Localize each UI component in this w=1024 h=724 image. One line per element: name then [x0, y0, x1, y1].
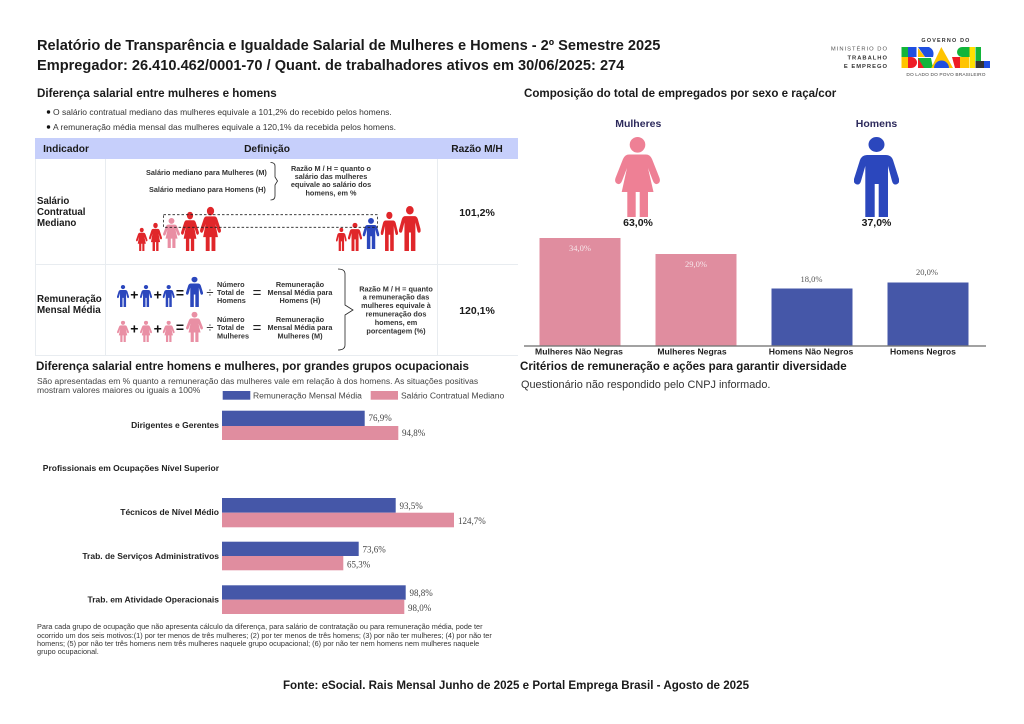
equation: women: =: [176, 319, 184, 335]
equation: men: +: [154, 286, 162, 302]
group: Técnicos: Técnicos de Nível Médio: [120, 507, 219, 517]
equation: women: Mensal Média para: [268, 323, 333, 332]
equation: women: Mulheres (M): [278, 332, 323, 340]
bullet list: A remuneração média mensal das mulheres equivale a 120,1% da recebida pelos homens.: [53, 122, 396, 132]
row: salário contratual mediano: equivale ao salário dos: [291, 180, 371, 189]
row: remuneração mensal média: Razão M / H = quanto: [359, 284, 433, 294]
equation: women: Total de: [217, 323, 244, 332]
logo: Ministério do Trabalho e Emprego: TRABALHO: [847, 56, 888, 62]
source line: Fonte: eSocial. Rais Mensal Junho de 2025 e Portal Emprega Brasil - Agosto de 2025: [283, 679, 750, 692]
group: Técnicos: 93,5%: [400, 501, 423, 511]
group: Dirigentes e Gerentes: 76,9%: [368, 413, 392, 423]
row: salário contratual mediano: homens, em %: [305, 188, 357, 198]
group: Serviços Administrativos: [82, 542, 386, 570]
indicator table: [35, 138, 518, 356]
logo: Ministério do Trabalho e Emprego: E EMPREGO: [844, 64, 888, 70]
group: Atividade Operacionais: 98,0%: [408, 603, 432, 613]
group: Serviços Administrativos: 65,3%: [347, 560, 371, 570]
footnote: Para cada grupo de ocupação que não apresenta cálculo da diferença, para salário de contratação ou para remuneração média, pode ter: [37, 622, 483, 631]
row: salário contratual mediano: [37, 162, 495, 251]
text: subtitle: [37, 376, 478, 395]
row: salário contratual mediano: Salário mediano para Mulheres (M): [146, 168, 267, 177]
row: salário contratual mediano: Contratual: [37, 207, 85, 218]
group: Técnicos: 124,7%: [458, 516, 486, 526]
row: salário contratual mediano: 101,2%: [459, 207, 495, 219]
row: remuneração mensal média: Remuneração: [37, 294, 102, 305]
row: salário contratual mediano: Razão M / H = quanto o: [291, 164, 372, 173]
row: salário contratual mediano: Mediano: [37, 218, 76, 229]
gender figure: Mulheres: [615, 118, 662, 229]
equation: men: +: [130, 286, 138, 302]
group: Atividade Operacionais: [88, 585, 433, 614]
group: Dirigentes e Gerentes: [131, 411, 426, 440]
bar chart: composição: 18,0%: [801, 274, 822, 284]
table header: [43, 144, 503, 155]
title: Relatório de Transparência e Igualdade Salarial de Mulheres e Homens - 2º Semestre 2025: [37, 38, 660, 54]
equation: men: Homens (H): [280, 296, 321, 305]
footnote: homens; (5) por não ter três homens nem três mulheres naquele grupo ocupacional; (6) por não ter nem homens nem mulheres naquele: [37, 639, 479, 648]
title: [37, 38, 660, 74]
logo: Governo do Brasil: [902, 38, 990, 78]
row: salário contratual mediano: Salário: [37, 196, 69, 207]
bar chart: composição: [524, 238, 986, 356]
equation: men: ÷: [206, 285, 214, 300]
bar chart: grupos ocupacionais: [43, 411, 486, 614]
bar chart: composição: Homens Não Negros: [769, 346, 853, 356]
row: remuneração mensal média: [37, 269, 495, 350]
equation: women: =: [253, 320, 262, 336]
gender figure: Homens: 37,0%: [862, 217, 892, 229]
equation: men: Mensal Média para: [268, 288, 333, 297]
legend: Salário Contratual Mediano: [401, 390, 504, 400]
legend: [223, 390, 504, 400]
bar chart: composição: 34,0%: [569, 243, 591, 253]
footnote: grupo ocupacional.: [37, 647, 99, 656]
equation: men: =: [253, 284, 262, 302]
group: Atividade Operacionais: Trab. em Atividade Operacionais: [88, 594, 219, 604]
footnote: ocorrido um dos seis motivos:(1) por ter menos de três mulheres; (2) por ter menos de três homens; (3) por não ter mulheres; (4) por não ter: [37, 631, 492, 640]
row: remuneração mensal média: porcentagem (%): [366, 326, 426, 336]
equation: men: =: [176, 284, 184, 300]
row: salário contratual mediano: salário das mulheres: [295, 172, 367, 181]
logo: Ministério do Trabalho e Emprego: MINISTÉRIO DO: [831, 46, 888, 52]
gender figure: Homens: Homens: [856, 118, 897, 130]
equation: women: +: [154, 320, 162, 336]
equation: men: [117, 277, 333, 307]
equation: women: Número: [217, 315, 245, 324]
gender figure: Mulheres: Mulheres: [615, 118, 662, 130]
text: subtitle: mostram valores maiores ou iguais a 100%: [37, 385, 201, 395]
group: Serviços Administrativos: 73,6%: [362, 544, 386, 554]
heading: grupos ocupacionais: Diferença salarial entre homens e mulheres, por grandes grupos ocupacionais: [36, 360, 469, 373]
equation: men: Total de: [217, 288, 244, 297]
equation: women: [117, 312, 333, 342]
footnote: [37, 622, 492, 656]
group: Atividade Operacionais: 98,8%: [410, 588, 433, 598]
equation: men: Número: [217, 280, 245, 289]
row: remuneração mensal média: mulheres equivale à: [361, 301, 432, 310]
row: remuneração mensal média: 120,1%: [459, 305, 495, 317]
bullet list: [47, 107, 396, 132]
text: subtitle: São apresentadas em % quanto a remuneração das mulheres vale em relação à dos homens. As situações positivas: [37, 376, 478, 386]
table header: Definição: [244, 144, 290, 155]
group: Serviços Administrativos: Trab. de Serviços Administrativos: [82, 551, 219, 561]
title: Empregador: 26.410.462/0001-70 / Quant. de trabalhadores ativos em 30/06/2025: 274: [37, 58, 625, 74]
group: Dirigentes e Gerentes: 94,8%: [402, 428, 426, 438]
equation: women: Mulheres: [217, 332, 249, 340]
equation: men: Homens: [217, 296, 246, 305]
legend: Remuneração Mensal Média: [253, 390, 362, 400]
table header: Indicador: [43, 144, 89, 155]
logo: Ministério do Trabalho e Emprego: [831, 46, 888, 70]
row: salário contratual mediano: Salário mediano para Homens (H): [149, 185, 266, 194]
bar chart: composição: 29,0%: [685, 259, 707, 269]
equation: women: Remuneração: [276, 315, 325, 324]
equation: women: +: [130, 320, 138, 336]
row: remuneração mensal média: homens, em: [375, 318, 418, 327]
logo: Governo do Brasil: GOVERNO DO: [921, 38, 971, 44]
equation: men: Remuneração: [276, 280, 325, 289]
logo: Governo do Brasil: DO LADO DO POVO BRASILEIRO: [906, 72, 986, 78]
icons: median men row: [336, 206, 421, 251]
equation: women: ÷: [206, 320, 214, 335]
heading: composição: Composição do total de empregados por sexo e raça/cor: [524, 88, 837, 100]
row: remuneração mensal média: Mensal Média: [37, 305, 101, 316]
gender figure: Homens: [854, 118, 899, 229]
bar chart: composição: Mulheres Não Negras: [535, 346, 623, 356]
row: remuneração mensal média: remuneração dos: [366, 310, 426, 318]
group: Técnicos: [120, 498, 486, 527]
heading: critérios: Critérios de remuneração e ações para garantir diversidade: [520, 361, 847, 373]
group: Dirigentes e Gerentes: Dirigentes e Gerentes: [131, 420, 219, 430]
bar chart: composição: 20,0%: [916, 267, 938, 277]
icons: median women row: [136, 207, 221, 251]
bullet list: O salário contratual mediano das mulheres equivale a 101,2% do recebido pelos homens.: [53, 107, 392, 117]
bar chart: composição: Homens Negros: [890, 346, 956, 356]
table header: Razão M/H: [451, 144, 503, 155]
bar chart: composição: Mulheres Negras: [657, 346, 727, 356]
group: Profissionais: Profissionais em Ocupações Nível Superior: [43, 463, 220, 473]
row: remuneração mensal média: a remuneração das: [363, 292, 429, 302]
gender figure: Mulheres: 63,0%: [623, 217, 654, 229]
text: questionário: Questionário não respondido pelo CNPJ informado.: [521, 379, 770, 391]
heading: diferença salarial: Diferença salarial entre mulheres e homens: [37, 87, 277, 100]
